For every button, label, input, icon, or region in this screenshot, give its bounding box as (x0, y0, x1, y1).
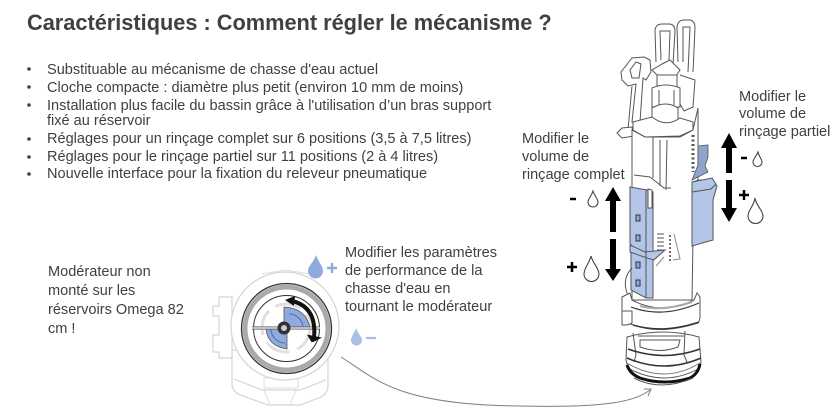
feature list: Cloche compacte : diamètre plus petit (environ 10 mm de moins) (47, 80, 463, 96)
icons: full flush plus drop (567, 256, 599, 282)
title: Caractéristiques : Comment régler le mécanisme ? (27, 10, 552, 35)
rotation arrow (285, 296, 319, 341)
feature list: Réglages pour un rinçage complet sur 6 positions (3,5 à 7,5 litres) (47, 131, 472, 147)
icons: partial flush minus drop (741, 152, 762, 166)
feature list: Installation plus facile du bassin grâce à l'utilisation d’un bras support (47, 98, 491, 114)
moderator description: Modifier les paramètres (345, 245, 497, 261)
note: moderator not fitted: Modérateur non (48, 264, 151, 280)
icon: drop minus (351, 328, 376, 346)
label: full flush volume: rinçage complet (522, 167, 625, 183)
label: partial flush volume (739, 89, 830, 140)
lower collar (622, 268, 700, 330)
label: partial flush volume: volume de (739, 106, 806, 122)
arrows: partial flush (721, 133, 737, 222)
blue slider: full flush (630, 187, 665, 298)
label: partial flush volume: Modifier le (739, 89, 806, 105)
feature list: Substituable au mécanisme de chasse d'eau actuel (47, 62, 378, 78)
label: partial flush volume: rinçage partiel (739, 124, 830, 140)
label: full flush volume (522, 131, 625, 183)
scale marks (656, 234, 680, 266)
feature list: fixé au réservoir (47, 113, 151, 129)
note: moderator not fitted: cm ! (48, 321, 75, 337)
feature list: Réglages pour le rinçage partiel sur 11 positions (2 à 4 litres) (47, 149, 438, 165)
feature list (27, 62, 491, 182)
note: moderator not fitted: réservoirs Omega 82 (48, 302, 184, 318)
blue sectors (284, 307, 310, 328)
moderator description: tournant le modérateur (345, 299, 492, 315)
blue slider: partial flush (692, 145, 717, 246)
top handles (655, 20, 695, 72)
label: full flush volume: volume de (522, 149, 589, 165)
icons: full flush minus drop (570, 191, 598, 207)
moderator description: de performance de la (345, 263, 483, 279)
flush mechanism illustration (617, 20, 717, 385)
moderator description (345, 245, 497, 315)
arrows: full flush (605, 187, 621, 281)
moderator illustration (213, 270, 339, 405)
connector arrow (341, 357, 651, 406)
feature list: Nouvelle interface pour la fixation du releveur pneumatique (47, 166, 427, 182)
main tube (632, 108, 698, 300)
note: moderator not fitted (48, 264, 184, 337)
moderator description: chasse d'eau en (345, 281, 450, 297)
note: moderator not fitted: monté sur les (48, 283, 135, 299)
label: full flush volume: Modifier le (522, 131, 589, 147)
moderator housing (213, 270, 339, 405)
icon: drop plus (308, 255, 337, 278)
moderator dial (242, 284, 332, 374)
lower cage and seal (626, 331, 701, 385)
icons: partial flush plus drop (739, 190, 763, 224)
top clip and head (617, 57, 695, 138)
